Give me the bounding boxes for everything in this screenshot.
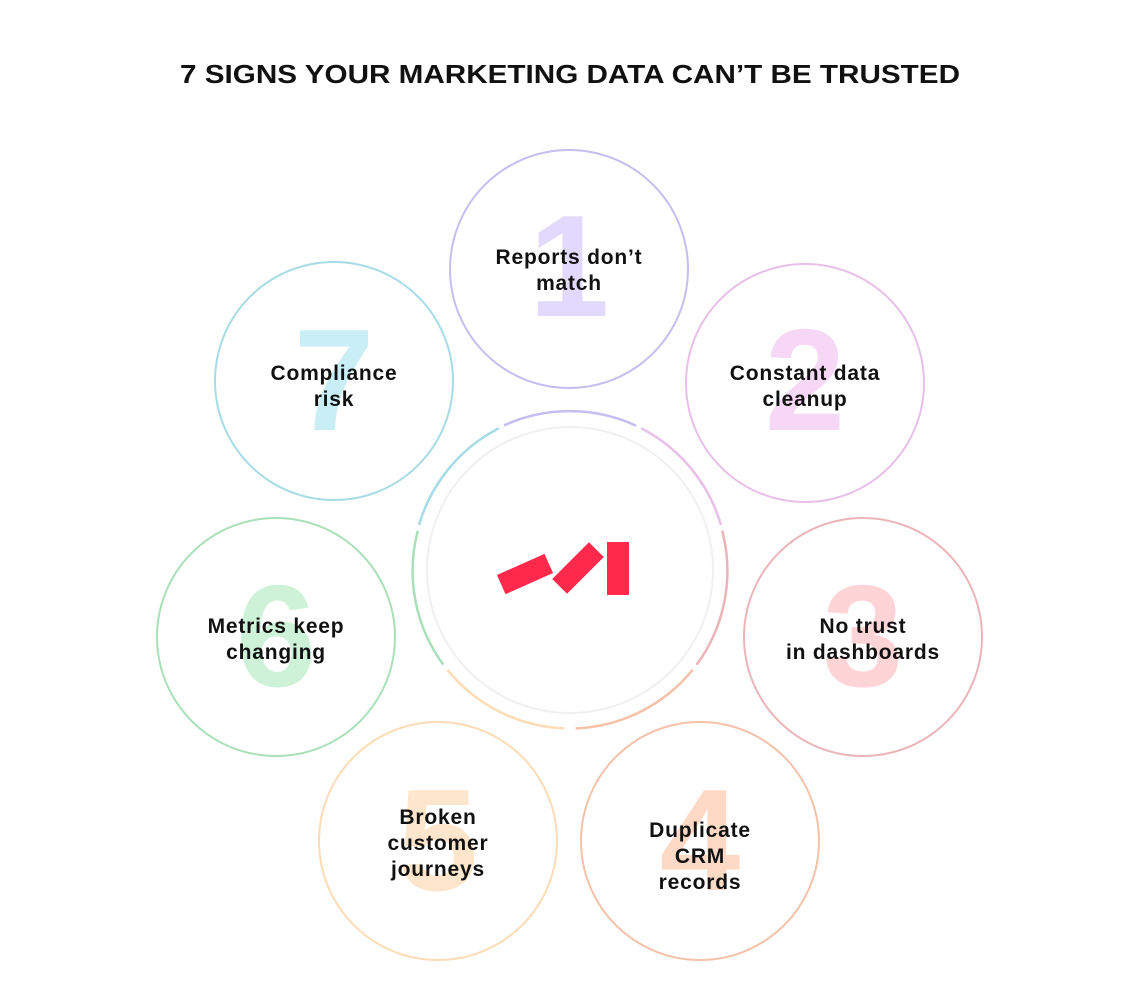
sign 7 (215, 262, 453, 500)
sign 3: 3 (823, 555, 903, 717)
center hub (413, 411, 727, 728)
sign 2 (686, 264, 924, 502)
sign 4: Duplicate (649, 819, 751, 842)
sign 6: 6 (236, 555, 316, 717)
sign 4: records (659, 871, 741, 894)
sign 3: in dashboards (786, 641, 940, 664)
logo (497, 542, 629, 595)
sign 2: Constant data (730, 362, 880, 385)
sign 1: 1 (529, 185, 609, 347)
sign 1 (450, 150, 688, 388)
sign 6: changing (226, 641, 326, 664)
sign 7: Compliance (270, 362, 398, 385)
sign 4 (581, 722, 819, 960)
sign 5: customer (388, 832, 488, 855)
sign 4: 4 (660, 759, 740, 921)
sign 6 (157, 518, 395, 756)
sign 5 (319, 722, 557, 960)
sign 5: journeys (390, 858, 485, 881)
sign 2: 2 (765, 299, 845, 461)
sign 1: Reports don’t (496, 246, 642, 269)
sign 3: No trust (820, 615, 906, 638)
title: 7 SIGNS YOUR MARKETING DATA CAN’T BE TRUSTED (180, 59, 960, 89)
sign 5: 5 (398, 759, 478, 921)
sign 7: 7 (294, 299, 374, 461)
sign 1: match (536, 272, 602, 295)
sign 2: cleanup (763, 388, 847, 411)
sign 7: risk (314, 388, 354, 411)
sign 3 (744, 518, 982, 756)
sign 6: Metrics keep (208, 615, 344, 638)
sign 5: Broken (399, 806, 477, 829)
sign 4: CRM (675, 845, 725, 868)
